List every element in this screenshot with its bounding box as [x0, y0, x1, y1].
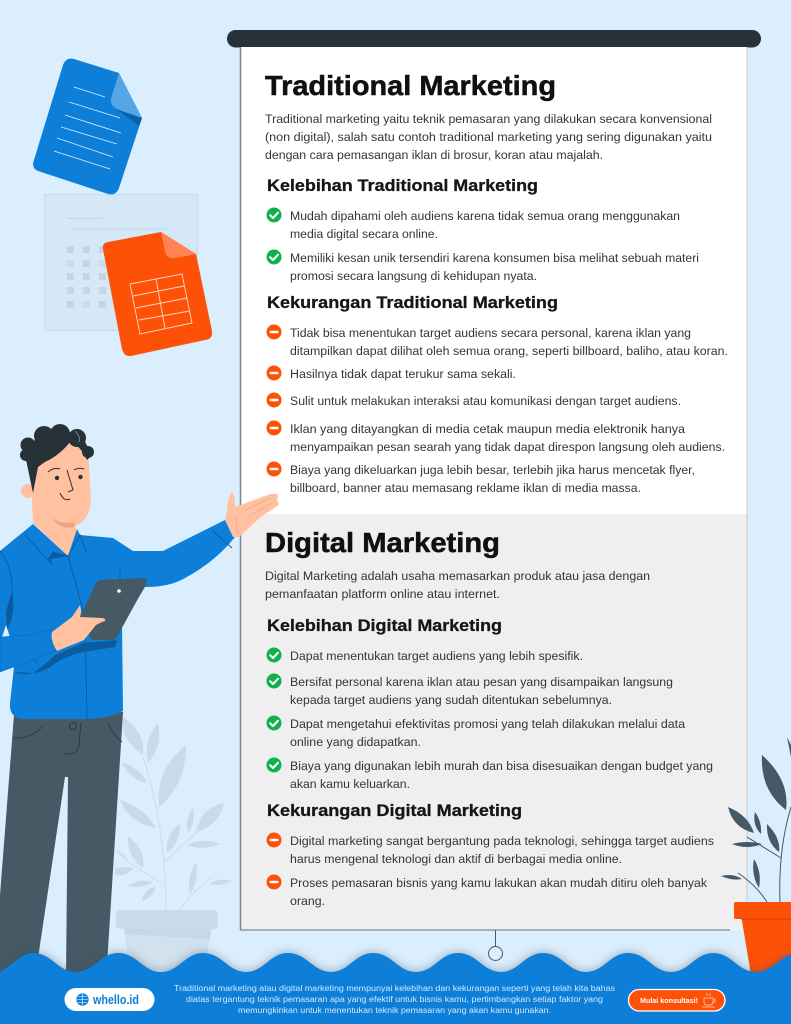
list: kelebihan digital — [266, 648, 713, 791]
list: kelebihan digital: Dapat mengetahui efektivitas promosi yang telah dilakukan melalui data — [290, 717, 685, 731]
heading: kelebihan digital: Kelebihan Digital Marketing — [267, 616, 502, 635]
list: kekurangan traditional: Hasilnya tidak dapat terukur sama sekali. — [290, 367, 516, 381]
list: kekurangan traditional: ditampilkan dapat dilihat oleh semua orang, seperti billboard, baliho, atau koran. — [290, 344, 728, 358]
list: kelebihan digital: akan kamu keluarkan. — [290, 777, 410, 791]
list: kekurangan digital — [266, 832, 714, 908]
man: tablet — [80, 578, 147, 640]
heading: kekurangan digital: Kekurangan Digital Marketing — [267, 801, 522, 820]
icon: pull cord — [488, 930, 502, 960]
man: shirt fold shadows — [0, 530, 232, 719]
list: kelebihan digital: online yang didapatkan. — [290, 735, 421, 749]
text block: footer message — [174, 984, 615, 1015]
man: face details — [48, 431, 84, 500]
list: kelebihan digital: Biaya yang digunakan lebih murah dan bisa disesuaikan dengan budget yang — [290, 759, 713, 773]
man: blue shirt — [0, 520, 235, 719]
list: kekurangan traditional: Biaya yang dikeluarkan juga lebih besar, terlebih jika harus mencetak flyer, — [290, 463, 695, 477]
text block: intro — [265, 569, 650, 601]
panel: traditional marketing — [240, 47, 747, 514]
man presenting — [0, 424, 279, 975]
man: left arm cuff — [0, 630, 57, 672]
list: kelebihan traditional: Memiliki kesan unik tersendiri karena konsumen bisa melihat sebuah materi — [290, 251, 699, 265]
icon: calendar background — [44, 194, 198, 330]
list: kekurangan traditional: menyampaikan pesan searah yang tidak dapat direspon langsung oleh audiens. — [290, 440, 725, 454]
list: kekurangan digital: orang. — [290, 894, 325, 908]
list: kekurangan traditional: Iklan yang ditayangkan di media cetak maupun media elektronik hanya — [290, 422, 685, 436]
text block: footer message: memungkinkan untuk menentukan teknik pemasaran yang akan kamu gunakan. — [238, 1006, 551, 1015]
icon: coffee cup — [702, 993, 715, 1007]
text block: intro: dengan cara pemasangan iklan di brosur, koran atau majalah. — [265, 148, 603, 162]
list: kelebihan traditional: media digital secara online. — [290, 227, 438, 241]
list: kekurangan digital: Digital marketing sangat bergantung pada teknologi, sehingga target audiens — [290, 834, 714, 848]
text block: footer message: Traditional marketing atau digital marketing mempunyai kelebihan dan kekurangan seperti yang telah kita bahas — [174, 984, 615, 993]
man: hand holding tablet — [52, 605, 105, 651]
panel: digital marketing — [240, 514, 747, 930]
man: raised hand — [225, 492, 279, 537]
list: kelebihan traditional: Mudah dipahami oleh audiens karena tidak semua orang menggunakan — [290, 209, 680, 223]
wave footer shadow — [0, 953, 791, 1000]
text block: intro: (non digital), salah satu contoh traditional marketing yang sering digunakan yaitu — [265, 130, 712, 144]
list: kelebihan traditional: promosi secara langsung di kehidupan nyata. — [290, 269, 537, 283]
list: kekurangan traditional: Sulit untuk melakukan interaksi atau komunikasi dengan target audiens. — [290, 394, 681, 408]
list: kekurangan digital: Proses pemasaran bisnis yang kamu lakukan akan mudah ditiru oleh banyak — [290, 876, 708, 890]
list: kelebihan digital: Bersifat personal karena iklan atau pesan yang disampaikan langsung — [290, 675, 673, 689]
list: kekurangan traditional: Tidak bisa menentukan target audiens secara personal, karena iklan yang — [290, 326, 691, 340]
man: hair — [20, 424, 94, 493]
icon: blue document — [33, 59, 142, 194]
title: Digital Marketing — [265, 527, 500, 558]
list: kekurangan traditional: billboard, banner atau memasang reklame iklan di media massa. — [290, 481, 641, 495]
man: trousers — [0, 712, 123, 975]
text block: intro — [265, 112, 712, 162]
heading: kelebihan traditional: Kelebihan Traditional Marketing — [267, 176, 538, 195]
text block: footer message: diatas tergantung teknik pemasaran apa yang efektif untuk bisnis kamu, pertimbangkan setiap faktor yang — [186, 995, 603, 1004]
button: mulai konsultasi — [628, 990, 725, 1011]
text block: intro: pemanfaatan platform online atau internet. — [265, 587, 500, 601]
list: kekurangan digital: harus mengenal teknologi dan aktif di berbagai media online. — [290, 852, 622, 866]
text block: intro: Traditional marketing yaitu teknik pemasaran yang dilakukan secara konvensional — [265, 112, 712, 126]
list: kelebihan digital: Dapat menentukan target audiens yang lebih spesifik. — [290, 649, 583, 663]
icon: orange spreadsheet document — [103, 232, 212, 356]
list: kelebihan traditional — [266, 208, 699, 283]
footer wave — [0, 953, 791, 1024]
list: kekurangan traditional — [266, 324, 728, 495]
title: Traditional Marketing — [265, 70, 556, 101]
logo: whello.id pill — [64, 988, 154, 1011]
panel: poster top bar — [227, 30, 761, 48]
heading: kekurangan traditional: Kekurangan Traditional Marketing — [267, 293, 558, 312]
plant: right potted plant — [721, 737, 791, 975]
list: kelebihan digital: kepada target audiens yang sudah ditentukan sebelumnya. — [290, 693, 612, 707]
icon: globe — [77, 994, 88, 1005]
text block: intro: Digital Marketing adalah usaha memasarkan produk atau jasa dengan — [265, 569, 650, 583]
button: mulai konsultasi: Mulai konsultasi! — [640, 996, 698, 1005]
plant: faded background plant — [115, 717, 232, 970]
logo: whello.id pill: whello.id — [92, 992, 139, 1007]
man: neck and face — [32, 438, 91, 556]
